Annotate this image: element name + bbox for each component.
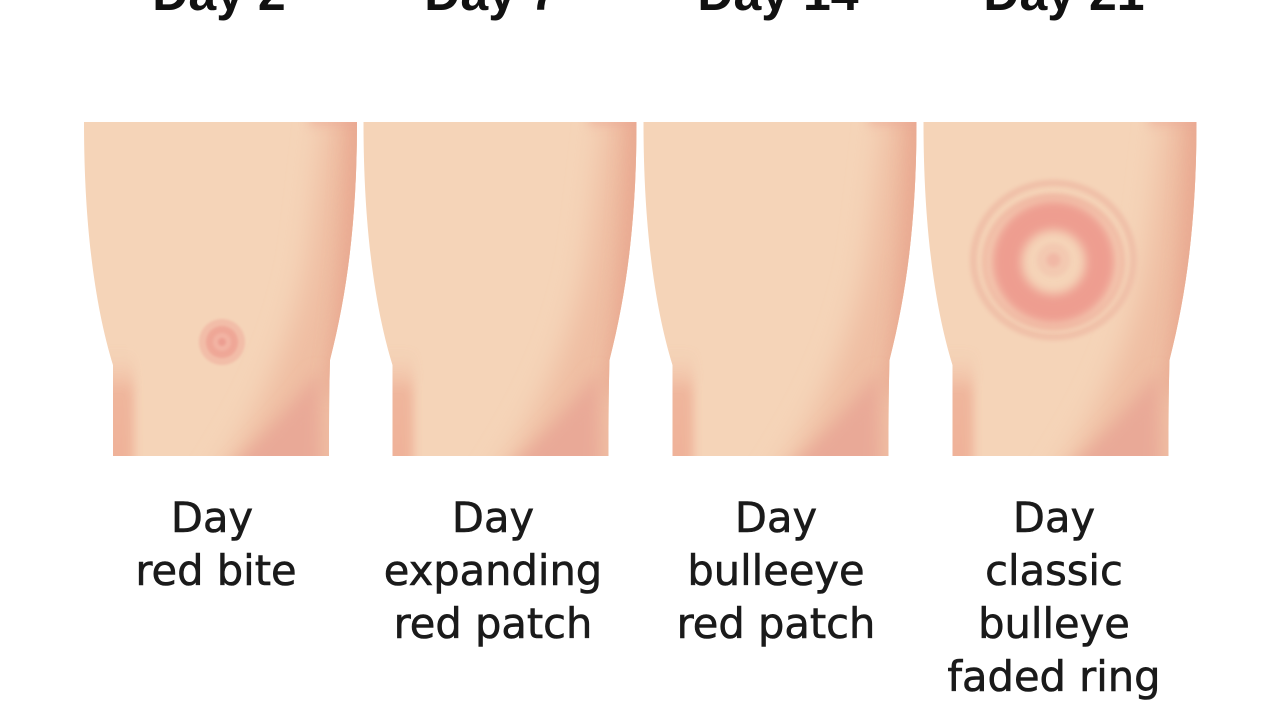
caption: day bulleeye red patch — [677, 493, 875, 648]
panel: leg with classic bullseye rash — [924, 100, 1234, 490]
caption: day expanding red patch: Day — [452, 493, 534, 542]
caption: day classic bulleye faded ring: bulleye — [978, 599, 1130, 648]
caption: day expanding red patch — [384, 493, 602, 648]
panel: leg with small red bite — [84, 100, 394, 490]
panel: leg day 14 — [644, 100, 954, 490]
caption: day expanding red patch: red patch — [394, 599, 592, 648]
caption: day classic bulleye faded ring: faded ring — [947, 652, 1161, 701]
caption: day classic bulleye faded ring: classic — [985, 546, 1123, 595]
caption: day red bite: Day — [171, 493, 253, 542]
icon: bullseye rash — [974, 183, 1134, 337]
panel: leg day 7 — [364, 100, 674, 490]
icon: small red bite rash — [199, 319, 245, 365]
caption: day bulleeye red patch: Day — [735, 493, 817, 542]
caption: day classic bulleye faded ring — [947, 493, 1161, 701]
caption: day bulleeye red patch: red patch — [677, 599, 875, 648]
caption: day expanding red patch: expanding — [384, 546, 602, 595]
caption: day red bite — [135, 493, 297, 595]
caption: day bulleeye red patch: bulleeye — [687, 546, 865, 595]
caption: day classic bulleye faded ring: Day — [1013, 493, 1095, 542]
caption: day red bite: red bite — [135, 546, 297, 595]
